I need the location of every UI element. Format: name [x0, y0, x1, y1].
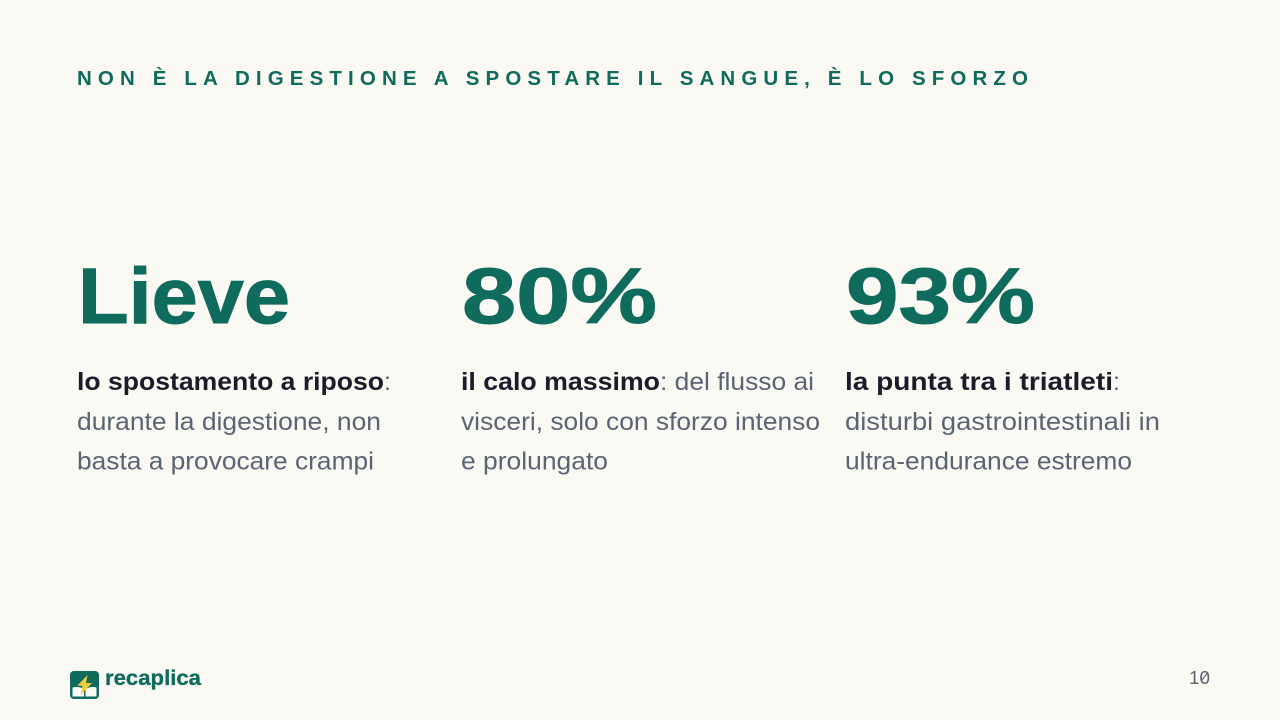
description: punta tra i triatleti: disturbi gastrointestinali in — [845, 408, 1160, 436]
page number: 10 — [1189, 668, 1210, 688]
description: punta tra i triatleti: ultra-endurance estremo — [845, 448, 1132, 476]
stat: 80%: 80% — [462, 251, 657, 340]
wordmark: recaplica — [105, 666, 202, 690]
description: punta tra i triatleti — [845, 368, 1160, 476]
panel: 80% — [461, 251, 820, 476]
description: punta tra i triatleti: la punta tra i triatleti — [845, 368, 1113, 396]
description: spostamento a riposo: : — [384, 368, 391, 396]
stat: 93%: 93% — [846, 251, 1035, 340]
description: spostamento a riposo: durante la digestione, non — [77, 408, 381, 436]
description: spostamento a riposo: lo spostamento a riposo — [77, 368, 384, 396]
description: spostamento a riposo: basta a provocare crampi — [77, 448, 374, 476]
panel: lieve — [77, 251, 391, 476]
title: NON È LA DIGESTIONE A SPOSTARE IL SANGUE, È LO SFORZO — [77, 67, 1028, 90]
logo — [70, 666, 202, 699]
description: calo massimo: : del flusso ai — [660, 368, 814, 396]
description: calo massimo — [461, 368, 820, 476]
description: spostamento a riposo — [77, 368, 391, 476]
panel: 93% — [845, 251, 1160, 476]
description: calo massimo: e prolungato — [461, 448, 608, 476]
description: punta tra i triatleti: : — [1113, 368, 1120, 396]
stat: Lieve: Lieve — [78, 251, 290, 340]
description: calo massimo: il calo massimo — [461, 368, 660, 396]
icon: book with lightning bolt — [70, 671, 99, 699]
description: calo massimo: visceri, solo con sforzo intenso — [461, 408, 820, 436]
